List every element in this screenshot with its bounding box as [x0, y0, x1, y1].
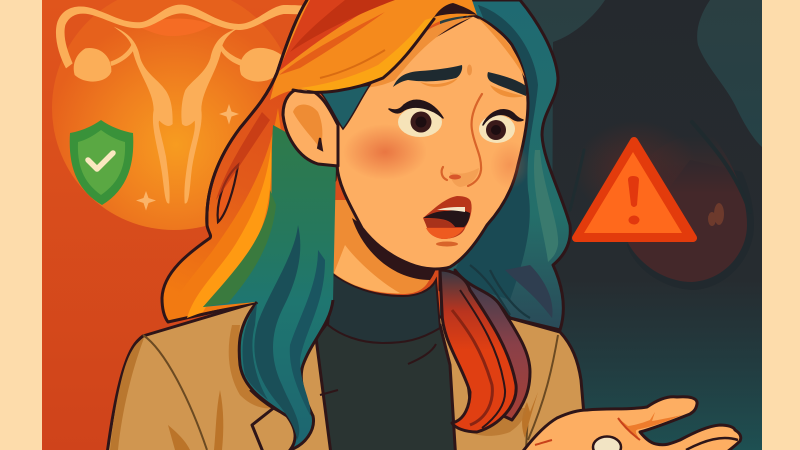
- lapel: [252, 403, 280, 450]
- hand with pill: [515, 397, 741, 450]
- eye right: [479, 110, 523, 143]
- background: dark right panel: [440, 0, 762, 450]
- icon: warning triangle: [576, 141, 693, 238]
- hair: orange band: [172, 108, 290, 318]
- panel: glowing circle with uterus: [52, 0, 340, 230]
- hair: left teal and green strands: [203, 125, 336, 450]
- eyebrows: [393, 65, 462, 87]
- neck: [332, 200, 440, 294]
- mouth: [423, 196, 472, 246]
- icon: green shield with check: [70, 120, 133, 205]
- hair outline: left edge: [207, 0, 307, 225]
- background: warm left panel: [42, 0, 462, 450]
- hair: yellow band: [187, 147, 271, 318]
- turtleneck: dark top: [316, 274, 456, 450]
- blush cheeks: [343, 124, 427, 180]
- hair: red lock: [440, 270, 516, 432]
- jacket shadow from hair: [229, 325, 275, 408]
- eye left: [389, 100, 443, 137]
- hair: purple red lock: [455, 270, 530, 420]
- brow shadow: [420, 78, 458, 87]
- ear: [283, 88, 338, 166]
- hair slit: [218, 165, 238, 222]
- teal hair wedge: [320, 85, 370, 129]
- hair: top orange sweep over forehead: [270, 0, 477, 100]
- face: [283, 15, 530, 269]
- hair: left mass in orange and red: [162, 0, 400, 322]
- jacket: tan blazer: [106, 300, 588, 450]
- hair: right teal mass: [440, 0, 570, 432]
- panel: dark breast silhouette: [552, 0, 762, 450]
- nose: [442, 64, 482, 187]
- icon: uterus and ovaries: [56, 5, 340, 203]
- icon: sparkles: [136, 104, 239, 210]
- icon: pill: [593, 436, 621, 450]
- forehead shading: [360, 17, 473, 88]
- lock outline: [239, 300, 333, 450]
